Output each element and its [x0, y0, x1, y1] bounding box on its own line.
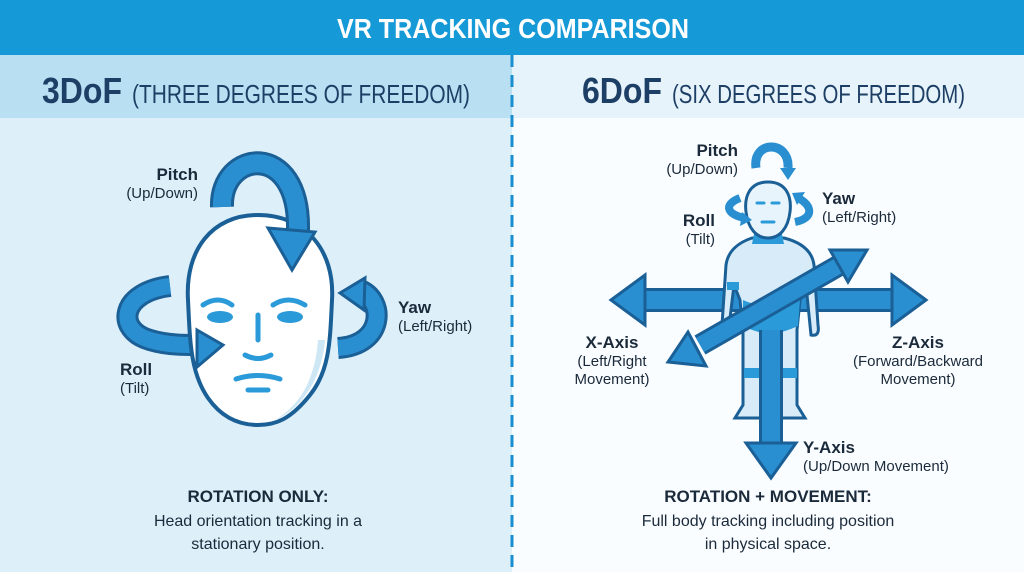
body — [721, 238, 818, 418]
labels 6DoF: Roll — [683, 211, 715, 230]
heading: 3DoF: (THREE DEGREES OF FREEDOM) — [132, 79, 470, 109]
labels 6DoF: Y-Axis — [803, 438, 855, 457]
diagonal arrow — [700, 262, 845, 345]
labels 6DoF: Yaw — [822, 189, 856, 208]
horizontal arrow — [640, 288, 895, 312]
heading: 3DoF: 3DoF — [42, 70, 122, 111]
labels 6DoF: Z-Axis — [892, 333, 944, 352]
labels 6DoF: X-Axis — [586, 333, 638, 352]
title banner — [0, 0, 1024, 55]
labels 3DoF: Pitch — [156, 165, 198, 184]
caption 6DoF: ROTATION + MOVEMENT: — [664, 487, 872, 506]
labels 6DoF: (Forward/Backward — [853, 353, 983, 370]
caption 3DoF: ROTATION ONLY: — [187, 487, 329, 506]
labels 6DoF: Pitch — [696, 141, 738, 160]
labels 3DoF: Roll — [120, 360, 152, 379]
title banner: VR TRACKING COMPARISON — [337, 13, 689, 44]
labels 6DoF: (Up/Down Movement) — [803, 458, 949, 475]
heading: 3DoF — [42, 70, 470, 111]
caption 6DoF: in physical space. — [705, 536, 831, 553]
head — [746, 182, 790, 238]
illustration: 3DoF head — [127, 163, 377, 425]
heading: 6DoF: 6DoF — [582, 70, 662, 111]
labels 6DoF: (Tilt) — [686, 231, 715, 248]
labels 6DoF: Movement) — [574, 371, 650, 388]
labels 6DoF: (Up/Down) — [666, 161, 738, 178]
labels 6DoF: (Left/Right — [577, 353, 647, 370]
labels 6DoF: Movement) — [880, 371, 956, 388]
caption 6DoF — [642, 487, 894, 553]
illustration: 6DoF body — [611, 147, 926, 478]
caption 3DoF — [154, 487, 362, 553]
labels 3DoF: (Left/Right) — [398, 318, 472, 335]
labels 3DoF: Yaw — [398, 298, 432, 317]
caption 3DoF: Head orientation tracking in a — [154, 513, 362, 530]
vertical arrow — [759, 330, 783, 445]
labels 3DoF: (Tilt) — [120, 380, 149, 397]
pitch/roll/yaw arrows — [756, 147, 788, 168]
labels 6DoF — [574, 141, 983, 475]
heading: 6DoF — [582, 70, 965, 111]
labels 6DoF: (Left/Right) — [822, 209, 896, 226]
caption 3DoF: stationary position. — [191, 536, 325, 553]
labels 3DoF — [120, 165, 472, 397]
labels 3DoF: (Up/Down) — [126, 185, 198, 202]
caption 6DoF: Full body tracking including position — [642, 513, 894, 530]
